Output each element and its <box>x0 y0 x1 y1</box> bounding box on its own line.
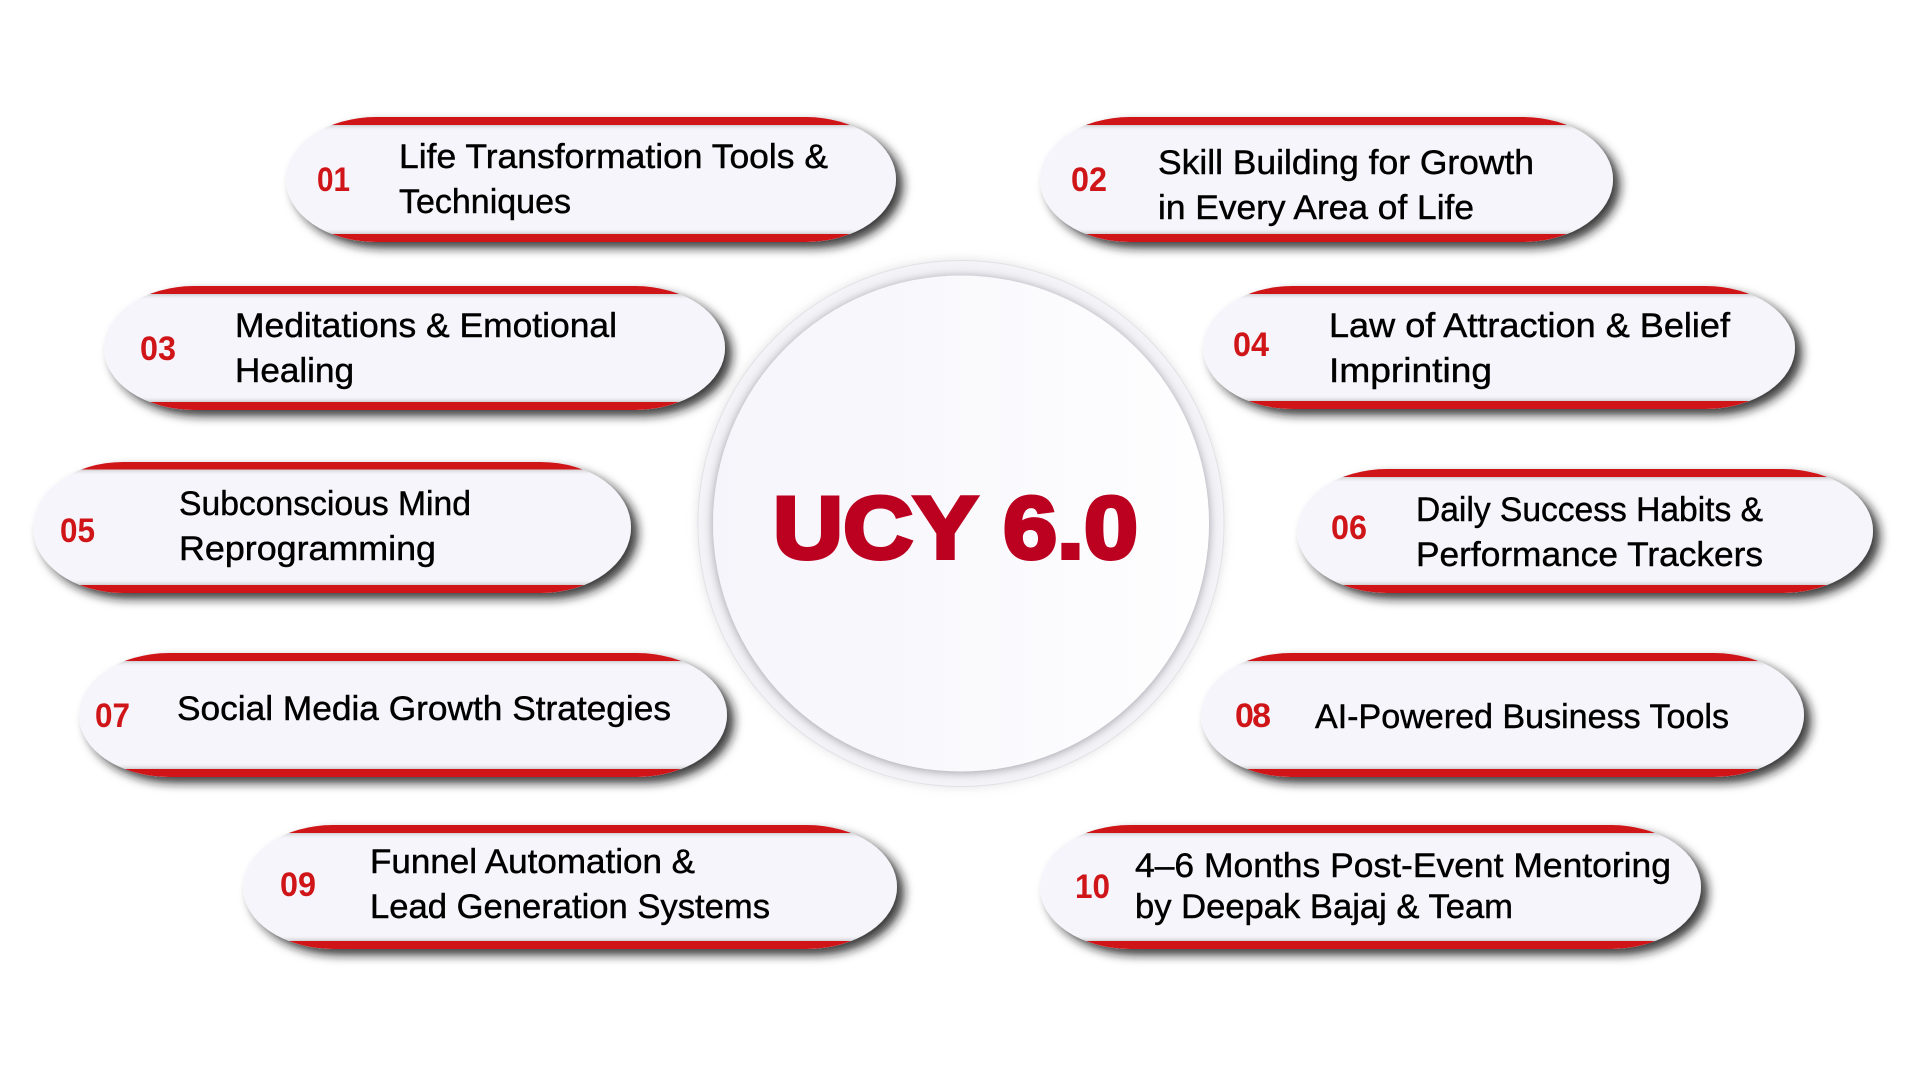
label 02: in Every Area of Life <box>1158 189 1474 227</box>
label 07: Social Media Growth Strategies <box>177 690 671 728</box>
title: UCY 6.0 <box>773 478 1138 577</box>
label 04: Law of Attraction & Belief <box>1329 307 1731 345</box>
label 06 <box>1416 491 1763 574</box>
label 03: Healing <box>235 352 354 390</box>
label 05: Subconscious Mind <box>179 485 471 523</box>
number 04: 04 <box>1233 326 1269 364</box>
pill 02 <box>1040 117 1613 242</box>
label 10: by Deepak Bajaj & Team <box>1135 888 1513 926</box>
label 09: Funnel Automation & <box>370 843 695 881</box>
label 10: 4–6 Months Post-Event Mentoring <box>1135 847 1671 885</box>
number 06: 06 <box>1331 509 1367 547</box>
label 03 <box>235 307 617 390</box>
label 06: Performance Trackers <box>1416 536 1763 574</box>
pill 07 <box>79 653 727 777</box>
label 06: Daily Success Habits & <box>1416 491 1763 529</box>
pill 06 <box>1297 469 1873 593</box>
label 04: Imprinting <box>1329 352 1492 390</box>
center circle <box>698 260 1224 786</box>
number 05: 05 <box>60 512 95 550</box>
pill 09 <box>243 825 897 949</box>
number 02: 02 <box>1071 161 1107 199</box>
label 09 <box>370 843 770 926</box>
label 03: Meditations & Emotional <box>235 307 617 345</box>
number 09: 09 <box>280 866 316 904</box>
pill 03 <box>104 286 725 410</box>
number 07: 07 <box>95 697 130 735</box>
number 10: 10 <box>1075 868 1110 906</box>
label 01: Techniques <box>399 183 571 221</box>
label 05: Reprogramming <box>179 530 436 568</box>
pill 01 <box>286 117 896 242</box>
label 02 <box>1158 144 1534 227</box>
label 04 <box>1329 307 1731 390</box>
label 01: Life Transformation Tools & <box>399 138 828 176</box>
label 05 <box>179 485 471 568</box>
pill 04 <box>1203 286 1795 409</box>
number 01: 01 <box>317 161 350 199</box>
label 08: AI-Powered Business Tools <box>1315 698 1729 736</box>
label 09: Lead Generation Systems <box>370 888 770 926</box>
number 08: 08 <box>1235 697 1271 735</box>
number 03: 03 <box>140 330 176 368</box>
pill 08 <box>1201 653 1804 777</box>
label 10 <box>1135 847 1671 926</box>
pill 10 <box>1040 825 1701 949</box>
label 02: Skill Building for Growth <box>1158 144 1534 182</box>
pill 05 <box>33 462 631 593</box>
label 01 <box>399 138 828 221</box>
